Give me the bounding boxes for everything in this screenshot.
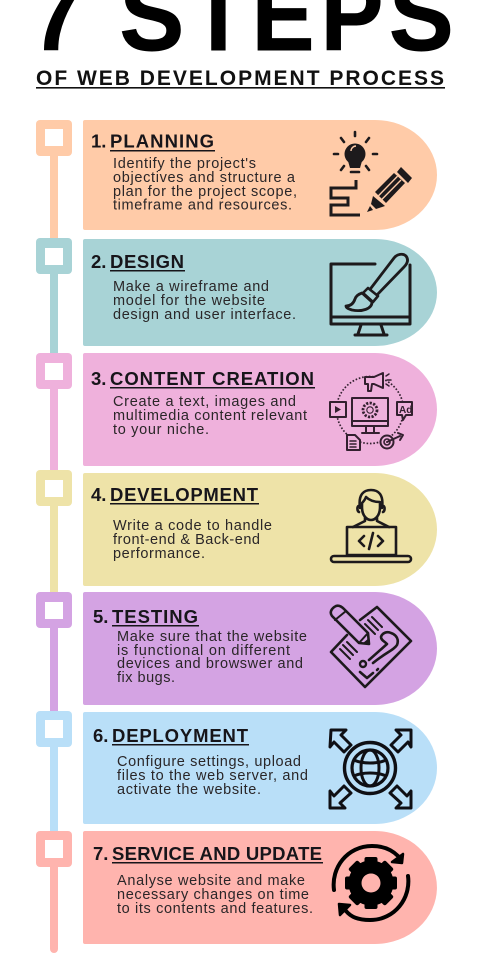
icon: developer at laptop: [331, 490, 411, 562]
body text: timeframe and resources.: [113, 198, 292, 214]
icon: monitor and paint brush: [331, 254, 410, 335]
body text: plan for the project scope,: [113, 184, 297, 200]
icon: content circle: [330, 373, 412, 450]
body text: performance.: [113, 546, 205, 562]
heading: DESIGN: [110, 251, 184, 272]
body text: Identify the project's: [113, 156, 256, 172]
body text: to your niche.: [113, 422, 209, 438]
body text: [117, 873, 313, 917]
heading: 1.: [91, 130, 106, 152]
body text: Analyse website and make: [117, 873, 305, 889]
body text: Create a text, images and: [113, 394, 296, 410]
panel: design: [83, 239, 437, 346]
body text: Configure settings, upload: [117, 754, 301, 770]
body text: [113, 156, 297, 214]
body text: model for the website: [113, 293, 265, 309]
body text: front-end & Back-end: [113, 532, 260, 548]
heading: 4.: [91, 484, 106, 505]
body text: activate the website.: [117, 782, 261, 798]
card background: [83, 592, 437, 705]
heading: SERVICE AND UPDATE: [112, 843, 322, 864]
heading: 5.: [93, 606, 108, 627]
subtitle: OF WEB DEVELOPMENT PROCESS: [36, 67, 444, 90]
body text: Write a code to handle: [113, 518, 272, 534]
timeline marker 4: [36, 470, 72, 595]
body text: [117, 629, 307, 686]
card background: [83, 239, 437, 346]
body text: objectives and structure a: [113, 170, 296, 186]
timeline marker 7: [36, 831, 72, 953]
timeline marker 6: [36, 711, 72, 834]
body text: [117, 754, 308, 798]
timeline marker 5: [36, 592, 72, 714]
heading: PLANNING: [110, 130, 214, 152]
panel: content creation: [83, 353, 437, 466]
body text: [113, 518, 272, 562]
timeline marker 3: [36, 353, 72, 473]
body text: to its contents and features.: [117, 901, 313, 917]
panel: planning: [83, 120, 437, 230]
body text: files to the web server, and: [117, 768, 308, 784]
body text: is functional on different: [117, 643, 290, 659]
card background: [83, 353, 437, 466]
body text: Make sure that the website: [117, 629, 307, 645]
timeline marker 1: [36, 120, 72, 242]
heading: DEPLOYMENT: [112, 725, 249, 746]
heading: TESTING: [112, 606, 198, 627]
card background: [83, 120, 437, 230]
panel: service and update: [83, 831, 437, 944]
body text: multimedia content relevant: [113, 408, 307, 424]
heading: 7.: [93, 843, 108, 864]
panel: deployment: [83, 712, 437, 824]
card background: [83, 831, 437, 944]
heading: 2.: [91, 251, 106, 272]
panel: testing: [83, 592, 437, 705]
body text: [113, 279, 296, 323]
title: [31, 0, 454, 73]
body text: Make a wireframe and: [113, 279, 269, 295]
heading: 3.: [91, 368, 106, 389]
body text: fix bugs.: [117, 670, 175, 686]
body text: necessary changes on time: [117, 887, 309, 903]
heading: CONTENT CREATION: [110, 368, 314, 389]
body text: design and user interface.: [113, 307, 296, 323]
icon: content circle: Ad: [399, 405, 412, 416]
icon: document with pencil and question mark: [331, 606, 411, 687]
icon: gear with refresh arrows: [334, 846, 408, 920]
icon: light bulb and pencil: [331, 132, 412, 215]
card background: [83, 712, 437, 824]
heading: DEVELOPMENT: [110, 484, 259, 505]
heading: 6.: [93, 725, 108, 746]
body text: devices and browswer and: [117, 656, 303, 672]
timeline marker 2: [36, 238, 72, 356]
body text: [113, 394, 307, 438]
panel: development: [83, 473, 437, 586]
card background: [83, 473, 437, 586]
icon: globe with outward arrows: [330, 730, 411, 808]
